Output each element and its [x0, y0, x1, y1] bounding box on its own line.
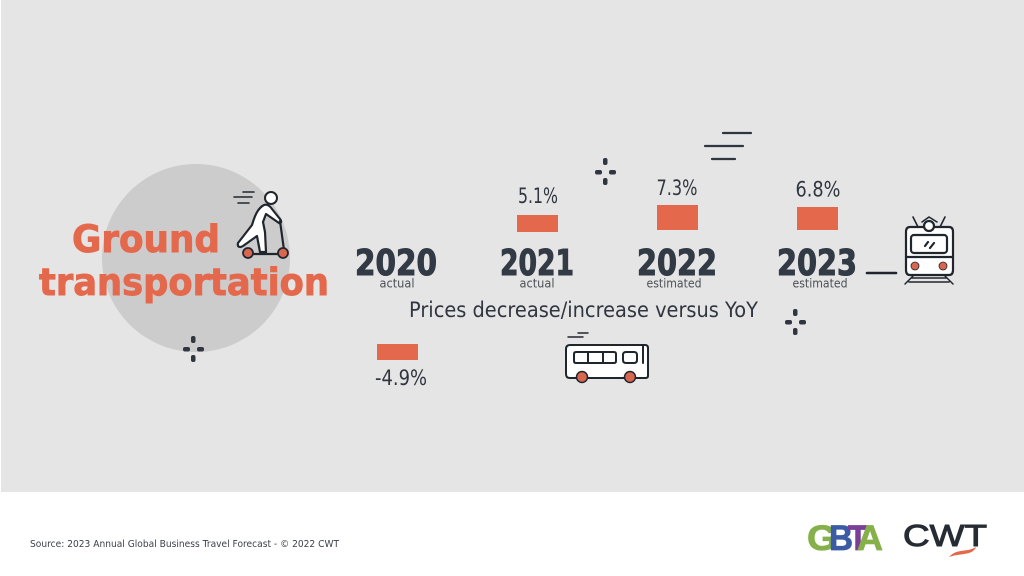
logo: GBTA: A	[857, 519, 883, 558]
bar: 2021: 5.1%	[518, 184, 558, 208]
year: 2022: 2022	[637, 243, 717, 284]
year: 2021: 2021	[500, 243, 574, 284]
title: transportation	[39, 261, 329, 304]
icon: person on scooter	[234, 192, 288, 258]
year: 2021	[500, 243, 574, 290]
logo: GBTA: T	[848, 519, 868, 558]
icon: sparkle top	[595, 158, 616, 185]
year: 2021: actual	[520, 276, 554, 290]
title	[39, 218, 329, 304]
year: 2023: estimated	[792, 276, 848, 290]
year: 2020: actual	[380, 276, 414, 290]
icon: train	[867, 217, 953, 284]
logo: GBTA	[807, 519, 883, 558]
icon: sparkle right	[785, 309, 806, 335]
icon: bus	[566, 333, 648, 382]
logo: GBTA: B	[829, 519, 853, 558]
bar: 2020: -4.9%	[375, 366, 427, 390]
icon: speed lines	[705, 133, 751, 159]
logo: GBTA: G	[807, 519, 837, 558]
bar: 2020	[375, 344, 427, 390]
year: 2022: estimated	[646, 276, 702, 290]
year: 2020: 2020	[355, 243, 437, 284]
logo: CWT: CWT	[903, 518, 987, 553]
caption: Prices decrease/increase versus YoY	[409, 298, 758, 322]
bar: 2023: 6.8%	[796, 178, 840, 202]
title: Ground	[72, 218, 220, 261]
bar: 2022: 7.3%	[656, 176, 698, 200]
source text: Source: 2023 Annual Global Business Travel Forecast - © 2022 CWT	[30, 539, 339, 550]
icon: sparkle left	[183, 336, 204, 362]
decorative circle	[102, 164, 290, 352]
bar: 2023	[796, 178, 840, 230]
bar: 2022	[656, 176, 698, 230]
year: 2023: 2023	[777, 243, 857, 284]
bar: 2021	[517, 184, 558, 232]
